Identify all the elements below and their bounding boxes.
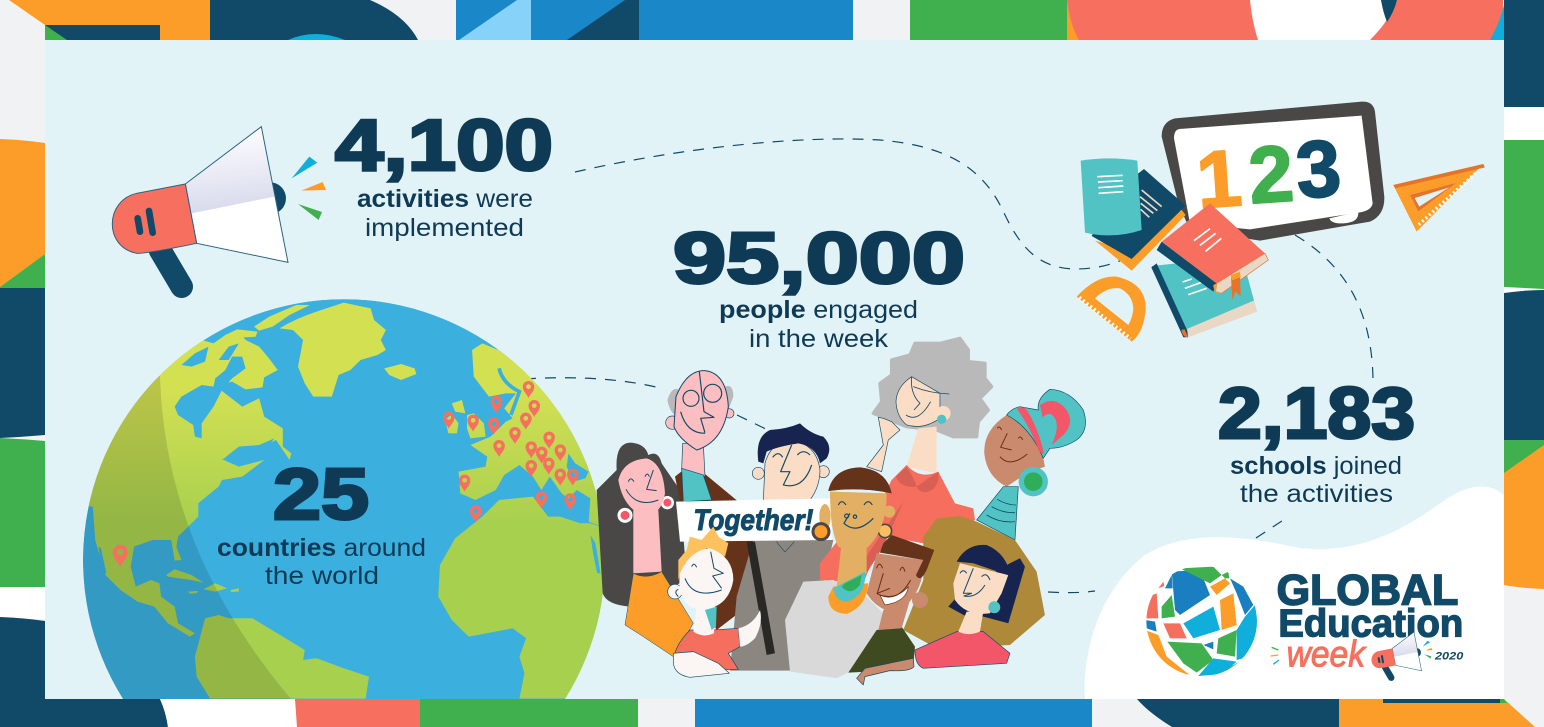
woman with navy bob [915, 545, 1025, 668]
navy book with orange pages [1092, 169, 1186, 271]
left woman face [618, 458, 693, 657]
man with navy hair [730, 423, 833, 671]
woman with grey hair [820, 338, 992, 583]
seas and lakes [98, 343, 600, 574]
stat: 95,000 people [673, 219, 965, 353]
stat: 4,100 activities [335, 106, 553, 242]
stat: 2,183 schools: the activities [1240, 480, 1393, 508]
triangle ruler [1393, 164, 1485, 232]
chalkboard: 2 [1246, 128, 1296, 220]
ocean [83, 299, 605, 699]
stat: 4,100 activities: activities were [357, 185, 533, 213]
teal book [1151, 258, 1257, 337]
dashed connector lines [525, 139, 1373, 593]
coral book [1157, 203, 1268, 300]
logo: Global Education Week 2020: week [1287, 632, 1367, 674]
banner sign [676, 498, 832, 552]
globe with continents [60, 299, 611, 699]
icon: school supplies [1077, 102, 1485, 342]
stat: 25 countries: 25 [273, 455, 369, 535]
stat: 4,100 activities: 4,100 [335, 106, 553, 186]
stat: 2,183 schools: 2,183 [1218, 374, 1415, 454]
stat: 25 countries: the world [265, 562, 379, 590]
teal paper [1081, 158, 1142, 235]
stat: 95,000 people: 95,000 [673, 219, 965, 299]
banner sign: Together! [693, 504, 814, 537]
protractor [1077, 277, 1146, 342]
continents [66, 303, 611, 699]
logo megaphone [1371, 632, 1432, 678]
night-side shading [60, 376, 291, 699]
chalkboard [1162, 102, 1384, 241]
bald man with glasses [666, 371, 760, 630]
stat: 2,183 schools: schools joined [1230, 452, 1402, 480]
icon: megaphone [112, 127, 326, 287]
chalkboard: 3 [1293, 123, 1344, 215]
woman with dark hair (back) [597, 443, 687, 607]
logo: Global Education Week 2020 [1145, 566, 1464, 678]
stat: 25 countries [217, 455, 426, 590]
woman with turban [977, 389, 1086, 540]
map pins [113, 381, 579, 567]
week rays [1271, 647, 1279, 664]
pole [747, 542, 775, 655]
white wave behind logo [1085, 487, 1504, 699]
woman with hat and necklace [785, 467, 895, 678]
logo: Global Education Week 2020: Education [1278, 603, 1463, 646]
mustard coat [903, 516, 1045, 648]
stat: 2,183 schools [1218, 374, 1415, 508]
man in olive shirt [848, 535, 934, 685]
hat woman face details [813, 467, 892, 550]
logo wordmark: GLOBAL [1277, 566, 1458, 614]
people illustration [597, 338, 1086, 685]
stat: 95,000 people: in the week [749, 325, 889, 353]
stat: 4,100 activities: implemented [365, 214, 524, 242]
logo globe [1145, 566, 1258, 677]
stat: 95,000 people: people engaged [719, 296, 918, 324]
boy with yellow hair [668, 527, 761, 677]
logo: Global Education Week 2020: 2020 [1434, 650, 1464, 662]
stat: 25 countries: countries around [217, 534, 426, 562]
chalkboard: 1 [1194, 133, 1244, 225]
